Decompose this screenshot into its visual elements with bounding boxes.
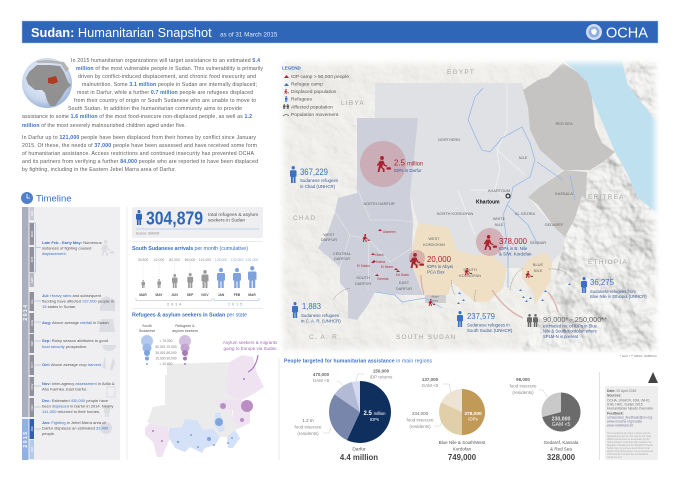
timeline heading: Timeline xyxy=(36,194,72,204)
Kordofan xyxy=(412,223,507,302)
year bar 2014: 2014 xyxy=(23,303,29,321)
panel: sources: needs are met. xyxy=(607,456,623,459)
legend: Population movement xyxy=(291,112,339,118)
map: refugees per state xyxy=(145,355,264,457)
state labels xyxy=(321,121,573,302)
callout: SPLM-N areas: Nile & South Kordofan where xyxy=(543,328,598,334)
Abyei xyxy=(425,295,446,303)
timeline connectors xyxy=(29,223,41,429)
callout: South Sudan refugees: South Sudan (UNHCR) xyxy=(467,328,513,333)
chart: monthly arrivals pictogram: 39,800 xyxy=(138,258,148,262)
intro text: from their country of origin or South Sudanese who are unable to move to xyxy=(74,98,256,104)
pie: Gedaref, Kassala and Red Sea: & Red Sea xyxy=(550,446,572,452)
callout: 2.5 million xyxy=(360,141,423,187)
legend: Affected population xyxy=(291,104,333,110)
pie: Blue Nile and Kordofan: 378,000 xyxy=(464,411,482,417)
legend: bubble sizes: 50,001-70,000 xyxy=(155,345,177,349)
legend: IDP camp > 50,000 people xyxy=(291,74,349,80)
entry: Jul xyxy=(42,293,114,309)
state labels: BLUE xyxy=(533,262,543,267)
intro text: million of the most severely malnourished children aged under five. xyxy=(22,123,186,129)
panel: sources: status of the Abyei area is not yet determined. xyxy=(607,450,654,453)
panel: sources: designations used on this map do not imply xyxy=(607,435,652,438)
pie: Gedaref, Kassala and Red Sea: (residents) xyxy=(512,390,534,395)
callout: Ethiopia refugees: Blue Nile in Ethiopia (UNHCR) xyxy=(590,294,647,299)
callout: Ethiopia refugees xyxy=(581,277,647,299)
entry: Jul: Jul: Heavy rains and subsequent xyxy=(42,293,102,298)
IDP camps: Alameen xyxy=(383,230,396,234)
pie: Gedaref, Kassala and Red Sea: food insecure xyxy=(509,384,537,388)
panel: sources: United Nations. Final boundary between the xyxy=(607,441,652,444)
callout: 20,000: 20,000 xyxy=(427,254,451,264)
month cells: NOV xyxy=(30,383,34,390)
IDP camps: Gereida xyxy=(377,277,389,281)
month cells xyxy=(30,207,34,459)
callout: SPLM-N areas: 90,000* - 250,000** xyxy=(543,315,607,324)
state labels: NORTHERN xyxy=(438,137,460,142)
pie: Darfur: 470,000 xyxy=(313,372,330,377)
panel: sources: OCHA, UNHCR, IOM, WHO, xyxy=(607,398,650,402)
pie: Blue Nile and Kordofan: 749,000 xyxy=(448,453,477,462)
chart: monthly arrivals pictogram: 110,000 xyxy=(199,258,211,262)
pie: Blue Nile and Kordofan: IDPs xyxy=(468,416,479,422)
legend: Refugees xyxy=(291,96,312,102)
heading: arrivals: South Sudanese arrivals per month (cumulative) xyxy=(132,246,248,252)
panel: sources: IOM, HAC, Sudan 2015 xyxy=(607,402,643,406)
state labels: WEST xyxy=(428,236,440,241)
callout: SPLM-N areas: SPLM-N is present xyxy=(543,334,579,339)
Khartoum marker: Khartoum xyxy=(476,200,500,206)
country labels: CHAD xyxy=(293,215,316,222)
timeline heading xyxy=(21,192,72,204)
pie: Blue Nile and Kordofan: (residents) xyxy=(409,424,431,429)
panel: total refugees xyxy=(132,207,263,238)
entry: Sep xyxy=(42,338,108,349)
column divider xyxy=(126,207,128,460)
IDP camps: El Salam xyxy=(357,264,370,268)
callout: SPLM-N areas: estimated no. of IDPs in Blue xyxy=(543,324,598,328)
callout: 378,000: 378,000 xyxy=(499,236,527,246)
entry: Dec: 141,000 returned to their homes. xyxy=(42,409,100,414)
Kassala and Gedaref xyxy=(528,170,587,237)
timeline entries xyxy=(42,240,115,436)
title: Sudan: Humanitarian Snapshot xyxy=(31,25,212,40)
panel: sources: official endorsement or acceptance by the xyxy=(607,438,650,441)
panel: sources: Date: 20 April 2015 xyxy=(607,389,636,393)
country labels: EGYPT xyxy=(447,69,475,76)
source: Source: UNHCR xyxy=(136,232,160,236)
pie: Darfur: 4.4 million xyxy=(340,453,378,462)
panel: sources: Humanitarian Needs Overview xyxy=(607,406,654,410)
date: as of 31 March 2015 xyxy=(220,32,278,38)
number caption: seekers in Sudan xyxy=(208,218,245,224)
header banner xyxy=(22,21,658,43)
month cells: DEC xyxy=(30,405,34,410)
entry: Feb-May: Late Feb - Early May: Numerous xyxy=(42,240,102,245)
callout: 20,000 xyxy=(409,250,453,274)
year bar 2015: 2015 xyxy=(23,430,29,448)
IDP camps xyxy=(357,229,409,281)
number caption: total refugees & asylum xyxy=(208,212,258,218)
pie: Gedaref, Kassala and Red Sea: 98,000 xyxy=(516,377,530,382)
panel: sources: OCHA works to ensure the humanitarian xyxy=(607,453,649,456)
chart: monthly arrivals pictogram: MAR xyxy=(248,293,256,297)
intro text: 2015. Of these, the needs of 37,000 people have been assessed and have received some form xyxy=(22,143,257,149)
chart: monthly arrivals pictogram: MAR xyxy=(139,293,147,297)
pie: Blue Nile and Kordofan: Blue Nile & South/West xyxy=(439,440,486,445)
state labels: DARFUR xyxy=(334,256,350,261)
entry: Feb-May: instances of fighting caused xyxy=(42,246,91,250)
chart: monthly arrivals pictogram: NOV xyxy=(201,293,209,297)
entry: Dec: Dec: Estimated 430,000 people have xyxy=(42,398,109,403)
panel: sources: Sources: xyxy=(607,394,622,398)
legend: bubble sizes: < 10,000 xyxy=(160,362,173,366)
intro text: driven by conflict-induced displacement, and chronic food insecurity and xyxy=(78,74,256,80)
entry: Sep: food security prospective. xyxy=(42,344,87,349)
callout: CAR refugees xyxy=(292,301,341,324)
month cells: JAN xyxy=(30,426,34,432)
panel: timeline xyxy=(22,207,120,460)
chart: monthly arrivals pictogram: 128,000 xyxy=(215,258,227,262)
right divider xyxy=(598,372,600,460)
pie: Blue Nile and Kordofan: GAM <5 xyxy=(422,383,439,388)
entry: Dec xyxy=(42,398,113,414)
callout: 378,000 xyxy=(476,228,532,256)
border lines xyxy=(283,60,525,315)
legend: Displaced population xyxy=(291,89,337,95)
callout: Ethiopia refugees: Sudanese refugees from xyxy=(590,289,636,294)
intro text: In 2015 humanitarian organizations will target assistance to an estimated 5.4 xyxy=(71,58,260,64)
pie: Gedaref, Kassala and Red Sea: Gedaref, Kassala xyxy=(544,440,579,445)
legend: Refugee camp xyxy=(291,82,323,88)
panel: sources: www.reliefweb.int xyxy=(607,424,633,428)
callout: South Sudan refugees xyxy=(457,311,513,333)
callout: 20,000: IDPs in Abyei xyxy=(427,264,453,269)
chart: monthly arrivals pictogram: MAY xyxy=(155,293,163,297)
pie: Gedaref, Kassala and Red Sea: GAM <5 xyxy=(552,422,570,428)
entry: Feb-May xyxy=(42,240,102,256)
IDP camps: Ed Daein xyxy=(396,273,409,277)
entry: Nov: Abu Karinka, East Darfur. xyxy=(42,386,87,392)
panel: sources: www.unocha.org/sudan xyxy=(607,420,642,424)
chart: monthly arrivals pictogram: 2014 xyxy=(167,302,183,306)
entry: Jul: flooding have affected 237,000 people in xyxy=(42,298,114,304)
map: Sudan overview xyxy=(275,55,665,355)
panel: sources: ochasudan_feedback@un.org xyxy=(607,416,652,420)
chart: monthly arrivals pictogram xyxy=(136,258,259,306)
pie: Darfur: 1.2 m xyxy=(302,418,314,423)
state labels: SOUTH xyxy=(356,275,370,280)
callout: 20,000: PCA Box xyxy=(427,270,445,274)
legend: LEGEND xyxy=(282,66,302,70)
IDP camps: Kalma xyxy=(376,260,385,264)
Sudan xyxy=(375,83,565,268)
intro text: In Darfur up to 121,000 people have been displaced from their homes by conflict since January xyxy=(22,135,256,141)
state labels: NILE xyxy=(534,268,543,273)
year bar 2015 xyxy=(22,419,29,460)
callout: CAR refugees: 1,883 xyxy=(302,301,321,311)
month cells: JUL xyxy=(30,299,34,304)
state labels: DARFUR xyxy=(355,281,371,286)
pie: Darfur: GAM <5 xyxy=(313,378,330,383)
pie: Blue Nile and Kordofan: food insecure xyxy=(406,418,434,422)
legend: bubble sizes: > 70,000 xyxy=(160,339,173,343)
state labels: AL GEZIRA xyxy=(515,211,535,216)
OCHA logo xyxy=(586,24,648,42)
chart: monthly arrivals pictogram: FEB xyxy=(234,293,241,297)
chart: monthly arrivals pictogram: SEP xyxy=(187,293,194,297)
heading: per state: Refugees & asylum seekers in Sudan per state xyxy=(132,312,247,318)
state labels: KASSALA xyxy=(555,191,573,196)
panel: sources: Sudan has not yet been determined. Final xyxy=(607,447,650,450)
pie: Darfur: Darfur xyxy=(352,446,366,452)
callout: 2.5 million: 2.5 million xyxy=(394,158,423,168)
legend: bubble sizes: 30,001-50,000 xyxy=(155,351,177,355)
intro text: million of the most vulnerable people in Sudan. This vulnerability is primarily xyxy=(76,66,263,72)
pie: Darfur: (residents) xyxy=(297,431,319,436)
legend: bubble sizes xyxy=(139,324,198,366)
legend: bubble sizes: Refugees & xyxy=(175,324,195,328)
state labels: WEST xyxy=(323,232,335,237)
callout: SPLM-N areas xyxy=(527,314,607,339)
panel: sources: Republic of Sudan and the Republic of South xyxy=(607,444,654,447)
country labels: C. A. R. xyxy=(309,334,341,341)
entry: Dec: been displaced in Darfur in 2014. Nearly xyxy=(42,404,113,408)
timeline background icons xyxy=(99,240,116,434)
intro text: malnutrition. Some 3.1 million people in Sudan are internally displaced; xyxy=(82,82,257,88)
country labels: LIBYA xyxy=(341,100,365,107)
state labels: SOUTH xyxy=(463,267,477,272)
intro text: assistance to some 1.6 million of the most food-insecure non-displaced people, as well as 1.2 xyxy=(22,114,252,120)
Refugee camps xyxy=(457,283,571,304)
entry: Jan: people. xyxy=(42,431,55,436)
state labels: NORTH DARFUR xyxy=(363,201,395,206)
pie: Gedaref, Kassala and Red Sea: 328,000 xyxy=(547,453,576,462)
pie: Darfur xyxy=(294,368,393,462)
IDP camps: El Neem xyxy=(381,265,394,269)
country labels: ETHIOPIA xyxy=(588,259,628,266)
IDP camps: Otash xyxy=(375,253,384,257)
entry: Feb-May: displacement. xyxy=(42,251,67,256)
state labels: KHARTOUM xyxy=(488,188,510,193)
callout: 378,000: & S/W. Kordofan xyxy=(499,252,532,256)
callout: Chad refugees: 367,229 xyxy=(300,167,328,177)
intro text: by fighting, including in the Eastern Jebel Marra area of Darfur. xyxy=(22,167,176,173)
month cells: AUG xyxy=(30,320,34,326)
chart: monthly arrivals pictogram: 82,000 xyxy=(169,258,180,262)
entry: Aug: Aug: Above average rainfall in Sudan xyxy=(42,320,109,325)
intro text: and its partners from verifying a further 84,000 people who are reported to have been displaced xyxy=(22,159,258,165)
pie: Gedaref, Kassala and Red Sea: 230,000 xyxy=(552,416,570,422)
state labels: DARFUR xyxy=(321,237,337,242)
intro text: of humanitarian assistance. Access restrictions and continued insecurity has prevented OCHA xyxy=(22,151,255,157)
globe icon xyxy=(22,58,72,108)
callout: Ethiopia refugees: 36,275 xyxy=(590,277,614,287)
chart: monthly arrivals pictogram: 151,000 xyxy=(246,258,258,262)
state labels: NILE xyxy=(495,222,504,227)
legend: bubble sizes: Sudanese xyxy=(139,329,155,333)
month cells: FEB xyxy=(30,211,34,216)
heading: People targeted for humanitarian assistance in main regions xyxy=(284,358,432,364)
pie: Blue Nile and Kordofan xyxy=(406,377,486,462)
pie: Blue Nile and Kordofan: 137,000 xyxy=(422,377,439,382)
population movement arrows xyxy=(333,268,573,318)
chart: monthly arrivals pictogram: 42,000 xyxy=(154,258,164,262)
month cells: APR xyxy=(30,257,34,262)
Red Sea state xyxy=(523,63,615,170)
panel: sources: The boundaries and names shown and the xyxy=(607,432,651,435)
country labels: ERITREA xyxy=(588,194,625,201)
rivers xyxy=(375,88,575,308)
state labels: area xyxy=(432,298,438,302)
state labels: KORDOFAN xyxy=(423,242,445,247)
state labels: Abyei xyxy=(431,294,439,298)
country labels: SOUTH SUDAN xyxy=(396,334,457,341)
month cells: OCT xyxy=(30,362,34,368)
legend: bubble sizes: 10,000-30,000 xyxy=(155,356,177,360)
state labels: DARFUR xyxy=(396,286,412,291)
callout: asylum seekers xyxy=(223,340,278,351)
month cells: MAR xyxy=(30,231,34,237)
Blue Nile xyxy=(522,252,552,305)
Khartoum marker xyxy=(476,194,510,206)
callout: CAR refugees: Sudanese refugees xyxy=(301,313,340,318)
legend: bubble sizes: asylum seekers xyxy=(172,329,198,333)
intro text: South Sudan. In addition the humanitarian community aims to provide xyxy=(68,106,242,112)
icon: person xyxy=(136,210,142,225)
pie: Blue Nile and Kordofan: 234,000 xyxy=(412,411,429,416)
panel: sources: Feedback: xyxy=(607,412,624,416)
state labels: SENNAR xyxy=(530,240,546,245)
chart: monthly arrivals pictogram: JAN xyxy=(218,293,225,297)
intro text: most in Darfur, while a further 0.7 million people are refugees displaced xyxy=(77,90,253,96)
callout: asylum seekers: going to Europe via Sudan xyxy=(223,346,277,351)
month cells: MAY xyxy=(30,277,34,283)
pie: Darfur: 150,000 xyxy=(373,368,390,374)
state labels: GEDAREF xyxy=(545,222,564,227)
entry: Nov xyxy=(42,381,115,392)
pie: Darfur: IDPs xyxy=(370,417,379,422)
month cells: FEB xyxy=(30,447,34,452)
pie: Darfur: 2.5 million xyxy=(364,411,386,417)
state labels: CENTRAL xyxy=(333,251,352,256)
country labels xyxy=(293,69,628,341)
year bar 2014 xyxy=(22,207,29,417)
entry: Jan xyxy=(42,420,109,436)
intro text xyxy=(22,58,263,173)
chart: monthly arrivals pictogram: 2015 xyxy=(228,302,244,306)
icon: logo triangle xyxy=(648,372,658,383)
callout: 2.5 million: IDPs in Darfur xyxy=(394,168,422,173)
pie: Blue Nile and Kordofan: Kordofan xyxy=(453,446,472,452)
chart: monthly arrivals pictogram: JUN xyxy=(171,293,178,297)
pie: Darfur: food insecure xyxy=(294,424,322,430)
callout: Chad refugees xyxy=(290,166,339,189)
pie: Darfur: IDP returns xyxy=(370,374,393,380)
OCHA logo: OCHA xyxy=(606,26,648,42)
callout: asylum seekers: Asylum seekers & migrants xyxy=(223,340,278,345)
chart: monthly arrivals pictogram: 85,000 xyxy=(185,258,195,262)
entry: Jul: 15 states in Sudan. xyxy=(42,304,76,309)
state labels: WHITE xyxy=(493,216,506,221)
state labels: RED SEA xyxy=(555,121,573,126)
callout: 378,000: IDPs in B. Nile xyxy=(499,246,528,251)
entry: Jan: Darfur displaces an estimated 32,400 xyxy=(42,426,109,430)
chart: monthly arrivals pictogram: 132,000 xyxy=(231,258,243,262)
pie: Gedaref, Kassala and Red Sea xyxy=(509,377,581,462)
sea xyxy=(563,60,660,215)
Darfur xyxy=(318,118,423,320)
panel: sources xyxy=(605,386,658,460)
callout: CAR refugees: in C. A. R. (UNHCR) xyxy=(301,318,341,324)
terrain xyxy=(275,55,665,355)
callout: South Sudan refugees: 237,579 xyxy=(467,311,495,321)
state labels: NORTH KORDOFAN xyxy=(437,211,474,216)
map footnote: * HAC / ** SRSG, SKBNCG xyxy=(620,354,658,358)
month cells: SEP xyxy=(30,341,34,346)
legend xyxy=(282,66,349,118)
panel: people targeted xyxy=(279,358,581,462)
callout: Chad refugees: in Chad (UNHCR) xyxy=(300,184,336,189)
entry: Nov: Nov: Inter-agency assessment in Adila & xyxy=(42,381,115,386)
number caption xyxy=(208,212,258,224)
legend: bubble sizes: South xyxy=(142,324,152,328)
state labels: KORDOFAN xyxy=(459,273,481,278)
state labels: NILE xyxy=(519,155,528,160)
entry: Sep: Sep: Rainy season attributes to good xyxy=(42,338,108,343)
callout: Chad refugees: Sudanese refugees xyxy=(300,178,339,183)
state labels: EAST xyxy=(399,280,410,285)
entry: Jan: Jan: Fighting in Jebel Marra area of xyxy=(42,420,107,425)
big number: 304,879 xyxy=(146,208,203,228)
callout: South Sudan refugees: Sudanese refugees in xyxy=(467,322,510,328)
Darfur and Abyei markers xyxy=(362,234,533,306)
entry: Oct: Oct: Above average crop harvest. xyxy=(42,362,102,367)
